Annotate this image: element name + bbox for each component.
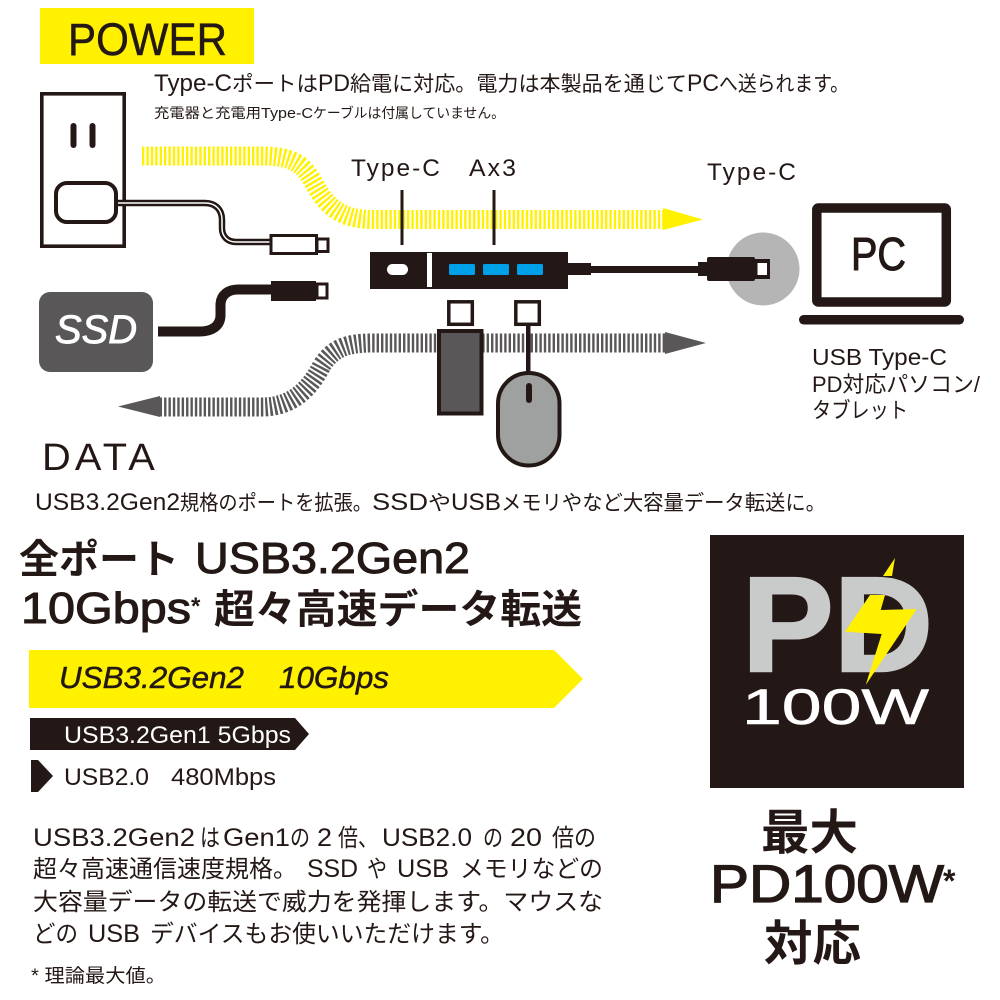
text: USB speed explanation: の — [483, 825, 503, 852]
text: compatible devices: PD対応パソコン/ — [812, 372, 981, 397]
heading: DATA: DATA — [42, 437, 159, 479]
text: USB speed explanation: Gen1 — [223, 824, 290, 852]
text: power description: ポートは — [232, 73, 318, 96]
text: compatible devices: USB Type-C — [812, 344, 947, 370]
text: power description: Type-C — [154, 70, 232, 97]
text: charger note: Type-C — [261, 105, 313, 122]
speed bar: USB2.0 — [31, 760, 276, 792]
text: power description: PD — [318, 70, 350, 97]
heading: all ports USB3.2Gen2 10Gbps — [19, 534, 582, 633]
text: USB speed explanation: 倍、 — [338, 825, 378, 852]
icon: USB mouse — [498, 302, 560, 466]
text: compatible devices — [812, 344, 981, 423]
icon: laptop PC: PC — [851, 228, 906, 280]
label: Ax3 hub ports: Ax3 — [469, 155, 518, 182]
text: USB speed explanation: 2 — [317, 824, 332, 852]
text: charger note: ケーブルは付属していません。 — [313, 105, 505, 121]
text: data description — [35, 489, 826, 516]
icon: USB hub with cable — [370, 252, 770, 289]
text: footnote: * 理論最大値。 — [31, 965, 166, 987]
text: USB speed explanation: USB2.0 — [382, 824, 472, 852]
heading: all ports USB3.2Gen2 10Gbps: 全ポート — [19, 538, 179, 582]
text: USB speed explanation: SSD — [307, 855, 358, 883]
arrow: yellow power flow — [142, 156, 703, 230]
speed bar: USB2.0: 480Mbps — [171, 764, 276, 791]
heading: POWER: POWER — [68, 14, 227, 65]
text: USB speed explanation: デバイスもお使いいただけます。 — [150, 921, 504, 948]
text: compatible devices: タブレット — [812, 398, 908, 423]
speed bar: USB2.0: USB2.0 — [64, 764, 149, 791]
heading: max PD100W supported — [710, 807, 956, 971]
text: power description: PC — [687, 70, 719, 97]
text: data description: USB3.2Gen2 — [35, 489, 180, 516]
heading: all ports USB3.2Gen2 10Gbps: USB3.2Gen2 — [195, 534, 470, 583]
text: charger note — [154, 105, 505, 122]
text: USB speed explanation: USB — [397, 855, 449, 883]
label: Type-C PC connector: Type-C — [707, 159, 798, 186]
text: USB speed explanation — [33, 824, 603, 948]
pointer lines to ports — [400, 190, 496, 245]
speed bar: USB3.2Gen1: USB3.2Gen1 5Gbps — [64, 722, 291, 749]
badge: PD 100W: PD — [742, 549, 933, 700]
text: charger note: 充電器と充電用 — [154, 105, 261, 121]
text: USB speed explanation: は — [200, 825, 220, 852]
text: power description: へ送られます。 — [719, 73, 849, 96]
badge: PD 100W — [710, 535, 964, 788]
text: USB speed explanation: 超々高速通信速度規格。 — [33, 856, 297, 883]
badge: PD 100W: 100W — [742, 679, 930, 735]
text: USB speed explanation: 大容量データの転送で威力を発揮します。マウスな — [33, 889, 603, 916]
speed bar: USB3.2Gen2: USB3.2Gen2 — [59, 660, 244, 695]
heading: max PD100W supported: PD100W — [710, 855, 944, 914]
arrow: gray data flow — [118, 332, 706, 417]
heading: max PD100W supported: * — [943, 863, 956, 899]
icon: SSD drive: SSD — [55, 308, 137, 352]
text: USB speed explanation: の — [290, 825, 310, 852]
text: USB speed explanation: 20 — [510, 824, 542, 852]
icon: wall outlet with charger — [42, 94, 328, 254]
heading: all ports USB3.2Gen2 10Gbps: * — [191, 593, 201, 620]
text: data description: メモリやなど大容量データ転送に。 — [501, 492, 826, 515]
speed bar: USB3.2Gen2: 10Gbps — [279, 660, 389, 695]
heading: all ports USB3.2Gen2 10Gbps: 10Gbps — [21, 584, 191, 633]
icon: USB memory stick — [439, 302, 482, 414]
text: data description: や — [428, 492, 451, 515]
text: USB speed explanation: や — [367, 856, 387, 883]
text: USB speed explanation: USB3.2Gen2 — [33, 824, 195, 852]
speed bar: USB3.2Gen2 — [29, 650, 583, 708]
text: USB speed explanation: USB — [88, 920, 140, 948]
icon: laptop PC — [799, 208, 964, 324]
text: data description: USB — [451, 489, 501, 516]
icon: SSD drive — [39, 281, 327, 372]
text: data description: 規格のポートを拡張。 — [180, 492, 372, 515]
heading: max PD100W supported: 対応 — [764, 918, 861, 971]
text: USB speed explanation: メモリなどの — [460, 856, 603, 883]
text: power description — [154, 70, 849, 97]
text: data description: SSD — [372, 489, 428, 516]
text: USB speed explanation: 倍の — [552, 825, 596, 852]
heading: all ports USB3.2Gen2 10Gbps: 超々高速データ転送 — [214, 587, 582, 632]
speed bar: USB3.2Gen1 — [30, 718, 309, 750]
heading: max PD100W supported: 最大 — [761, 807, 858, 860]
text: USB speed explanation: どの — [33, 921, 78, 948]
text: power description: 給電に対応。電力は本製品を通じて — [350, 73, 687, 96]
icon: gray highlight circle — [726, 232, 800, 306]
label: Type-C hub port: Type-C — [351, 155, 442, 182]
